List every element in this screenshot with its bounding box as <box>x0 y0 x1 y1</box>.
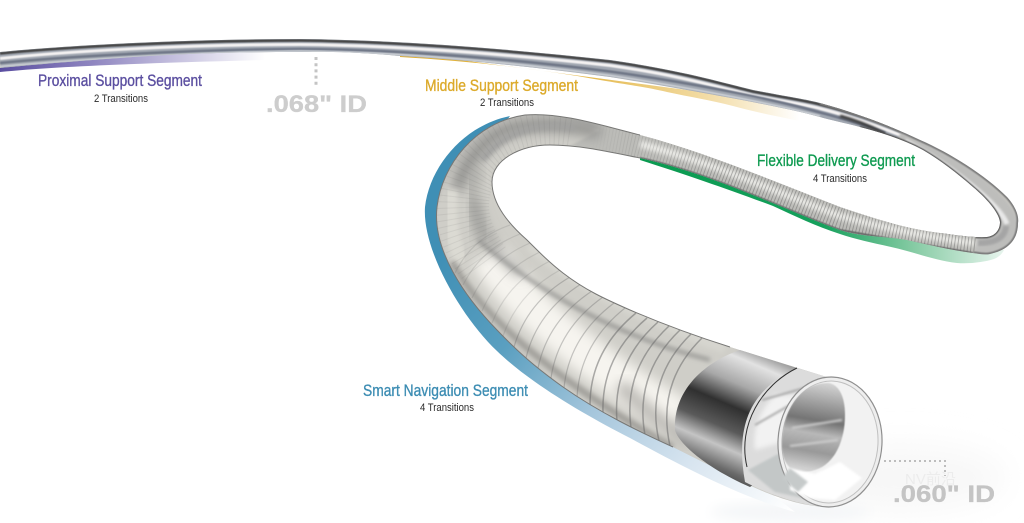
bottom glare <box>790 462 862 500</box>
label: flexible delivery segment: Flexible Delivery Segment <box>757 151 915 170</box>
callout: .068 inner diameter: .068" ID <box>266 91 367 118</box>
label: flexible delivery segment: 4 Transitions <box>813 173 867 185</box>
dark metal band <box>675 350 797 487</box>
label: middle support segment <box>425 76 578 109</box>
callout: .060 inner diameter: .060" ID <box>893 481 995 508</box>
blue crescent: smart navigation segment <box>425 116 795 512</box>
tube opening <box>775 374 885 510</box>
thin proximal and middle shaft <box>0 40 925 148</box>
purple crescent: proximal segment <box>0 48 265 72</box>
label: smart navigation segment: 4 Transitions <box>420 402 474 414</box>
label: proximal support segment: 2 Transitions <box>94 93 148 105</box>
translucent tip sleeve <box>742 368 830 507</box>
inner bore <box>782 383 845 472</box>
watermark haze <box>710 446 1005 522</box>
gold crescent: middle segment <box>400 52 800 121</box>
label: proximal support segment: Proximal Support Segment <box>38 71 202 90</box>
label: middle support segment: 2 Transitions <box>480 97 534 109</box>
loop bend <box>820 103 1018 254</box>
label: flexible delivery segment <box>757 151 915 185</box>
label: proximal support segment <box>38 71 202 105</box>
label: middle support segment: Middle Support Segment <box>425 76 578 95</box>
tube edge outline <box>436 115 730 447</box>
big tube shading <box>437 117 800 500</box>
fine coil lines on bend <box>462 130 570 266</box>
callout: .060 inner diameter: NV前沿 <box>905 471 956 488</box>
green crescent: flexible segment <box>640 155 1004 263</box>
label: smart navigation segment <box>363 381 528 414</box>
callout: .060 inner diameter <box>884 461 995 508</box>
callout: .068 inner diameter <box>266 57 367 118</box>
label: smart navigation segment: Smart Navigation Segment <box>363 381 528 400</box>
flexible coil section <box>555 130 975 253</box>
reinforcement ribs <box>455 225 702 446</box>
